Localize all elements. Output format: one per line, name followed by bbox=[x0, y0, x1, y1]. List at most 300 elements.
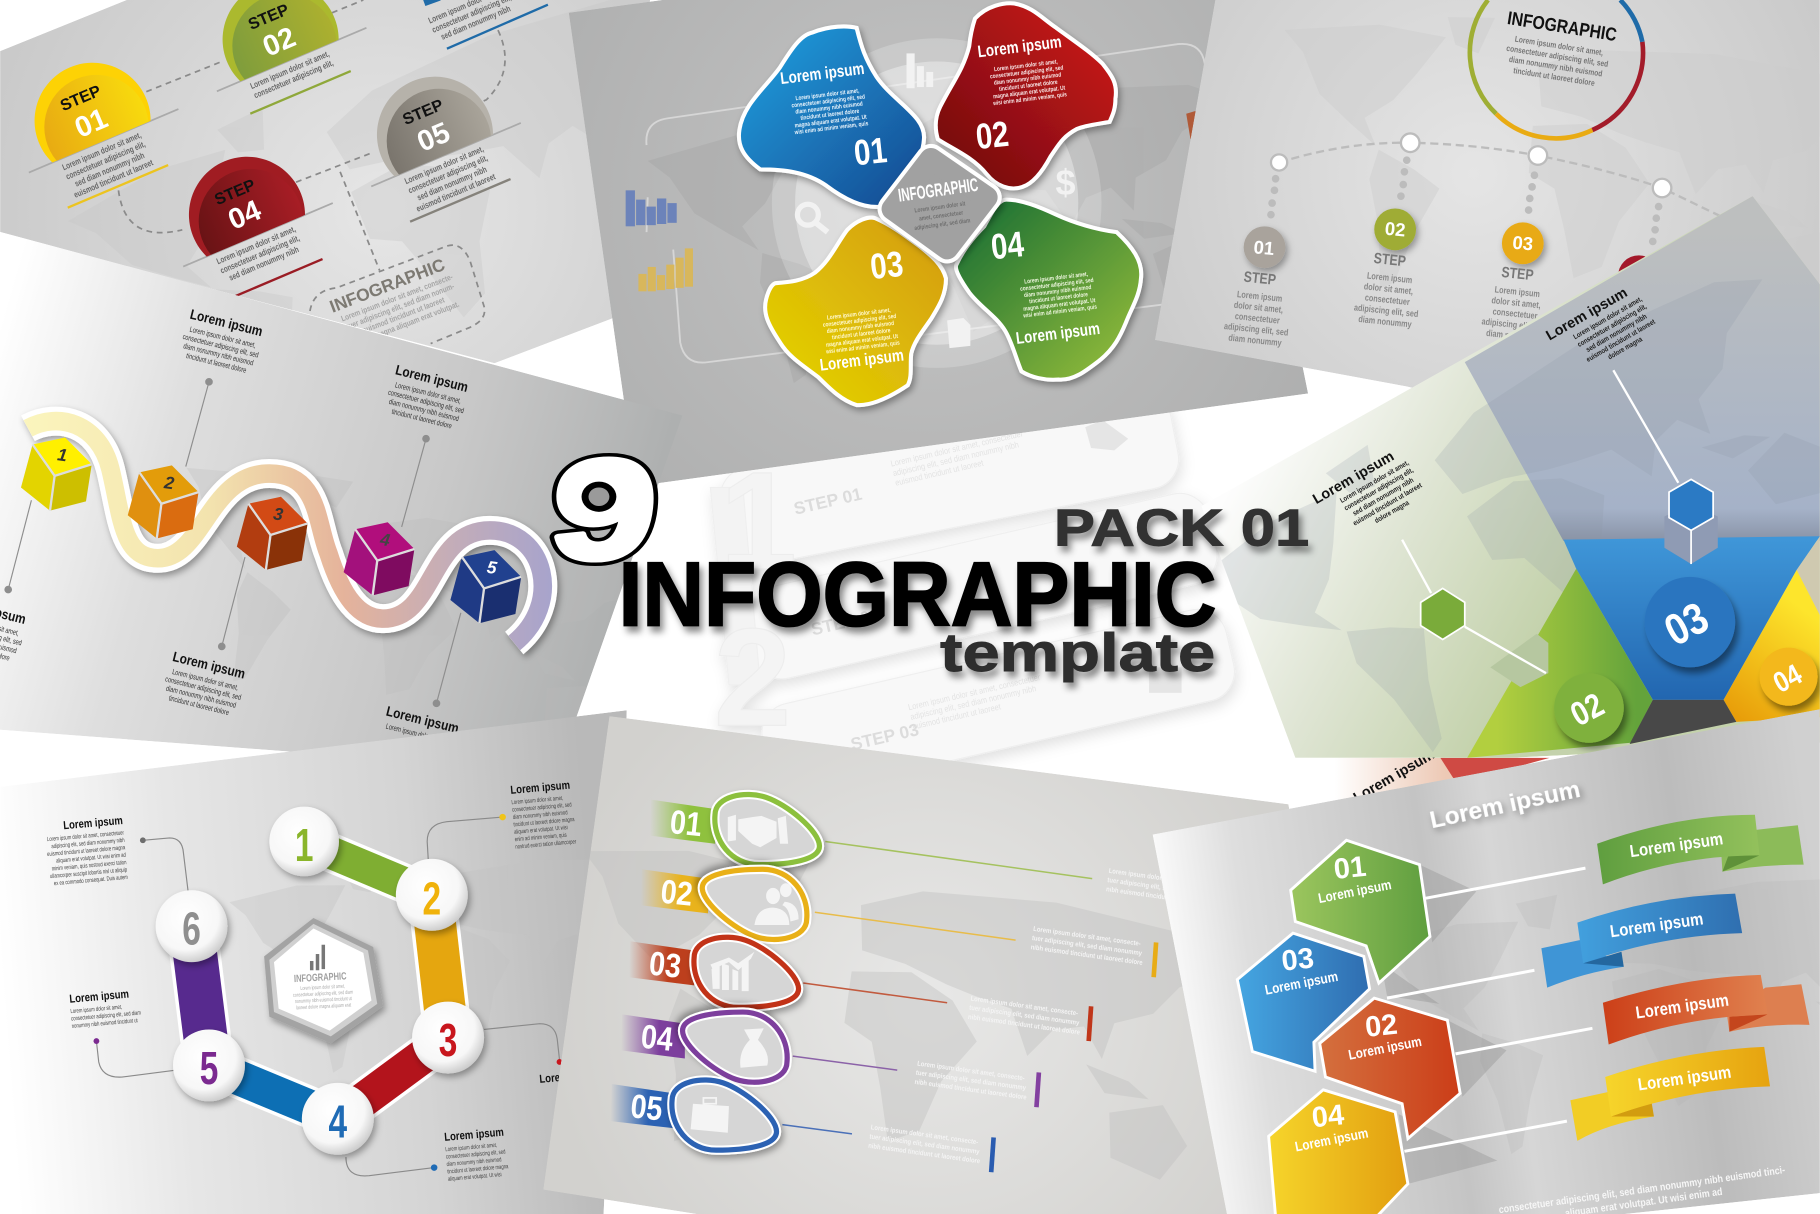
item 03: 03 bbox=[647, 944, 683, 985]
centre diamond: Lorem ipsum dolor sit bbox=[914, 201, 966, 215]
step 03 timeline bbox=[1480, 222, 1550, 344]
panel: embossed white steps template: STEP 01 bbox=[792, 484, 864, 519]
blob 02 red: magna aliquam erat volutpat. Ut bbox=[993, 85, 1066, 101]
title: template: template bbox=[940, 624, 1215, 683]
centre hexagon: laoreet dolore magna aliquam erat bbox=[296, 1002, 352, 1011]
blob 03 yellow bbox=[765, 218, 946, 405]
step 02 timeline: 02 bbox=[1384, 218, 1406, 240]
long shadows bbox=[1381, 865, 1507, 1184]
ball 5 bbox=[173, 1029, 245, 1101]
callout text 3: diam nonummy nibh euismod bbox=[165, 685, 237, 710]
text block top left: aliquam erat volutpat. Ut wisi enim ad bbox=[56, 852, 126, 865]
text block top left: minim veniam, quis nostrud exerci tation bbox=[51, 859, 127, 873]
infographic dashed box text: tuer adipiscing elit, sed diam nonum- bbox=[345, 281, 456, 331]
step 01 timeline bbox=[1222, 226, 1292, 349]
blob 04 green: diam nonummy nibh euismod bbox=[1024, 285, 1092, 299]
blue trapezoid bbox=[1563, 536, 1820, 700]
panel: embossed white steps template: 1 bbox=[720, 443, 797, 599]
left text block bbox=[1310, 443, 1429, 547]
panel: embossed white steps template bbox=[710, 386, 1240, 801]
step 02 timeline: diam nonummy bbox=[1358, 313, 1413, 330]
item 04: 04 bbox=[639, 1018, 675, 1058]
text block lower left bbox=[69, 987, 142, 1030]
ring text bbox=[1506, 11, 1616, 86]
step 02 timeline: STEP bbox=[1373, 250, 1407, 270]
step 03 fragment: sed diam nonummy nibh bbox=[439, 3, 512, 42]
text block clipped right: Lorem ipsum bbox=[539, 1068, 600, 1086]
step 03 timeline: adipiscing elit, sed bbox=[1481, 315, 1547, 333]
text block top right: consectetuer adipiscing elit, sed bbox=[512, 802, 572, 814]
panel: embossed white steps template: STEP 03 bbox=[849, 719, 921, 754]
white descriptions: tuer adipiscing elit, sed diam nonummy bbox=[915, 1069, 1027, 1092]
hex 03: 03 bbox=[1280, 943, 1316, 978]
callout text 4: tincidunt ut laoreet dolore bbox=[391, 408, 453, 431]
text block bottom: tincidunt ut laoreet dolore magna bbox=[447, 1164, 509, 1176]
text block top left: Lorem ipsum bbox=[63, 814, 123, 833]
text block top left: Lorem ipsum dolor sit amet, consectetuer bbox=[47, 830, 124, 843]
centre diamond: amet, consectetuer bbox=[919, 210, 964, 223]
blob 01 blue: wisi enim ad minim veniam, quis bbox=[793, 121, 869, 137]
red fragment panel under triangle slide bbox=[1286, 747, 1549, 812]
blob 01 blue: Lorem ipsum dolor sit amet, bbox=[795, 88, 860, 102]
text block top right: diam nonummy nibh euismod bbox=[513, 810, 568, 821]
hex 04: 04 bbox=[1310, 1099, 1346, 1134]
step 05: consectetuer adipiscing elit, bbox=[407, 153, 489, 196]
panel: embossed white steps template: adipiscing elit, sed diam nonummy nibh bbox=[909, 684, 1037, 722]
text block top right: tincidunt ut laoreet dolore magna bbox=[513, 816, 575, 829]
panel: embossed white steps template: Lorem ipsum dolor sit amet, consectetuer bbox=[907, 672, 1042, 712]
step 02 timeline bbox=[1352, 208, 1422, 330]
white descriptions: tuer adipiscing elit, sed diam nonummy bbox=[1031, 935, 1143, 958]
step 05 bbox=[371, 76, 521, 223]
callout text 5: Lorem ipsum bbox=[385, 703, 461, 736]
blob 02 red: Lorem ipsum dolor sit amet, bbox=[994, 59, 1059, 73]
blob 04 green: 04 bbox=[989, 223, 1026, 267]
white descriptions: nibh euismod tincidunt ut laoreet dolore bbox=[1106, 886, 1219, 909]
item 02 bbox=[641, 869, 807, 939]
white descriptions: Lorem ipsum dolor sit amet, consecte- bbox=[917, 1060, 1025, 1083]
text block top left: euismod tincidunt ut laoreet dolore magna bbox=[47, 845, 126, 858]
white descriptions: Lorem ipsum dolor sit amet, consecte- bbox=[1108, 867, 1217, 890]
step 03 timeline: consectetuer bbox=[1492, 306, 1539, 321]
ribbon blue: Lorem ipsum bbox=[1609, 909, 1705, 942]
ring text: diam nonummy nibh euismod bbox=[1508, 54, 1603, 79]
ball 3: 3 bbox=[439, 1014, 457, 1066]
cube 1: 1 bbox=[56, 444, 69, 465]
text block bottom bbox=[444, 1126, 509, 1183]
ball 2 bbox=[396, 859, 468, 931]
item 03 bbox=[629, 937, 799, 1007]
step 04: STEP bbox=[212, 176, 258, 209]
step 01 timeline: consectetuer bbox=[1234, 310, 1281, 326]
text block top right: nostrud exerci tation ullamcorper bbox=[515, 839, 577, 851]
text block top left bbox=[44, 814, 128, 888]
left text block: Lorem ipsum bbox=[1310, 448, 1397, 508]
callout text 3: Lorem ipsum dolor sit amet, bbox=[171, 668, 239, 693]
ring text: INFOGRAPHIC bbox=[1506, 7, 1618, 45]
panel: embossed white steps template: STEP 02 bbox=[809, 604, 881, 639]
right text block: sed diam nonummy nibh bbox=[1585, 313, 1648, 354]
background circle bbox=[772, 38, 1102, 368]
panel: embossed white steps template: adipiscing elit, sed diam nonummy nibh bbox=[892, 440, 1020, 478]
panel: embossed white steps template: Lorem ipsum dolor sit amet, consectetuer bbox=[890, 429, 1024, 469]
text block lower left: Lorem ipsum dolor sit amet, bbox=[70, 1004, 123, 1015]
centre hexagon bbox=[264, 918, 383, 1043]
title: PACK 01: PACK 01 bbox=[1054, 499, 1309, 557]
step 02: STEP bbox=[246, 1, 292, 34]
blob 02 red: wisi enim ad minim veniam, quis bbox=[992, 92, 1067, 108]
blob 01 blue: 01 bbox=[852, 129, 889, 173]
hex 04 bbox=[1269, 1090, 1408, 1214]
item 05 bbox=[611, 1080, 777, 1150]
infographic dashed box text: Lorem ipsum dolor sit amet, consecte- bbox=[340, 271, 455, 324]
step 03 timeline: diam nonummy bbox=[1486, 327, 1540, 344]
cube 3: 3 bbox=[272, 503, 285, 525]
text block bottom: consectetuer adipiscing elit, sed bbox=[446, 1149, 506, 1161]
blob 01 blue: diam nonummy nibh euismod bbox=[795, 101, 863, 116]
ribbon blue bbox=[1541, 894, 1742, 988]
text block top left: ex ea commodo consequat. Duis autem bbox=[54, 874, 128, 888]
white descriptions: Lorem ipsum dolor sit amet, consecte- bbox=[970, 995, 1078, 1018]
leader lines bbox=[782, 841, 1092, 1134]
yellow bar chart bbox=[638, 248, 693, 291]
cube 5 bbox=[450, 550, 521, 623]
blob 03 yellow: wisi enim ad minim veniam, quis bbox=[825, 340, 900, 356]
hex 02: Lorem ipsum bbox=[1347, 1033, 1423, 1063]
step 02: 02 bbox=[258, 21, 300, 63]
ribbon yellow: Lorem ipsum bbox=[1637, 1063, 1732, 1095]
step 05: Lorem ipsum dolor sit amet, bbox=[403, 144, 485, 186]
centre hexagon: nonummy nibh euismod tincidunt ut bbox=[295, 995, 352, 1004]
text block top left: ullamcorper suscipit lobortis nisl ut aliquip bbox=[50, 867, 128, 880]
callout text 2: Lorem ipsum dolor sit amet, bbox=[189, 326, 257, 350]
panel: egg icon list bbox=[543, 716, 1370, 1214]
white descriptions: nibh euismod tincidunt ut laoreet dolore bbox=[914, 1078, 1027, 1102]
step 02 bbox=[216, 0, 367, 115]
circle 04 bbox=[1760, 648, 1818, 706]
blob 02 red bbox=[936, 3, 1116, 188]
blob 02 red: diam nonummy nibh euismod bbox=[994, 72, 1062, 87]
blob 04 green: Lorem ipsum dolor sit amet, bbox=[1024, 271, 1089, 286]
hex 04: Lorem ipsum bbox=[1294, 1125, 1370, 1155]
text block top right bbox=[510, 779, 577, 851]
coloured side bars bbox=[989, 942, 1158, 1172]
text block lower left: nonummy nibh euismod tincidunt ut bbox=[72, 1018, 139, 1030]
icon: document bbox=[947, 318, 970, 348]
ribbon green: Lorem ipsum bbox=[1629, 829, 1724, 862]
hex 03: Lorem ipsum bbox=[1263, 968, 1339, 998]
step 01 timeline: diam nonummy bbox=[1228, 332, 1283, 348]
step 05: 05 bbox=[413, 117, 455, 159]
icon: bars white bbox=[907, 53, 933, 88]
hex 01 bbox=[1291, 840, 1430, 983]
green segment bbox=[1467, 569, 1653, 758]
node dots bbox=[1267, 156, 1662, 245]
infographic dashed box text: INFOGRAPHIC bbox=[327, 254, 448, 317]
icon: magnifier bbox=[797, 204, 828, 232]
dark segment bbox=[1630, 700, 1736, 744]
blue hex column bbox=[1613, 370, 1718, 564]
step 03 fragment bbox=[422, 0, 548, 49]
text block top right: aliquam erat volutpat. Ut wisi bbox=[514, 825, 568, 836]
step 01: euismod tincidunt ut laoreet bbox=[72, 157, 155, 200]
ribbon orange bbox=[1603, 975, 1809, 1045]
cube 1 bbox=[21, 438, 92, 511]
ribbon orange: Lorem ipsum bbox=[1634, 991, 1730, 1023]
ball 4: 4 bbox=[329, 1095, 348, 1148]
blob 01 blue: magna aliquam erat volutpat. Ut bbox=[794, 114, 867, 130]
icon: briefcase bbox=[691, 1098, 729, 1133]
blob 02 red: tincidunt ut laoreet dolore bbox=[999, 79, 1058, 93]
blob 04 green: consectetuer adipiscing elit, sed bbox=[1020, 277, 1094, 293]
panel: snake with cubes bbox=[0, 229, 683, 772]
callout text 2: diam nonummy nibh euismod bbox=[182, 343, 254, 368]
icon: handshake bbox=[728, 815, 788, 847]
panel: timeline with ring bbox=[1155, 0, 1820, 388]
step 03 timeline: STEP bbox=[1501, 264, 1534, 283]
callout text 4: Lorem ipsum dolor sit amet, bbox=[394, 382, 462, 406]
icon: money bag bbox=[740, 1028, 768, 1068]
callout text 2: Lorem ipsum bbox=[188, 306, 264, 339]
step 03 timeline: dolor sit amet, bbox=[1491, 294, 1541, 311]
item 01 bbox=[650, 794, 819, 865]
callout text 3: Lorem ipsum bbox=[171, 648, 247, 682]
right text block: dolore magna bbox=[1607, 336, 1644, 362]
white descriptions: Lorem ipsum dolor sit amet, consecte- bbox=[1033, 925, 1141, 948]
blue bar chart bbox=[626, 190, 677, 226]
step 05: euismod tincidunt ut laoreet bbox=[415, 171, 497, 214]
blob 01 blue: consectetuer adipiscing elit, sed bbox=[791, 94, 865, 110]
blob 03 yellow: Lorem ipsum bbox=[819, 346, 905, 375]
step 05: sed diam nonummy nibh bbox=[415, 164, 489, 203]
step 01: STEP bbox=[58, 82, 104, 115]
white descriptions bbox=[868, 867, 1221, 1166]
centre diamond bbox=[893, 159, 987, 248]
blob 02 red: consectetuer adipiscing elit, sed bbox=[990, 65, 1064, 81]
right text block: Lorem ipsum dolor sit amet, bbox=[1572, 296, 1644, 341]
callout text 5: Lorem ipsum dolor sit amet, bbox=[385, 723, 453, 747]
panel: hexagon ring bbox=[0, 710, 685, 1214]
text block bottom: Lorem ipsum bbox=[444, 1126, 504, 1144]
hex 02 bbox=[1320, 998, 1460, 1139]
white descriptions: nibh euismod tincidunt ut laoreet dolore bbox=[967, 1014, 1081, 1037]
rounded frame outline bbox=[646, 44, 1230, 363]
step 01 timeline: 01 bbox=[1253, 236, 1275, 259]
ribbon bbox=[28, 421, 543, 643]
panel: five steps semicircles bbox=[0, 0, 650, 363]
callout text 2: tincidunt ut laoreet dolore bbox=[185, 352, 247, 375]
green hex connector bbox=[1402, 540, 1548, 687]
ball 3 bbox=[412, 1002, 484, 1074]
ball 5: 5 bbox=[200, 1042, 218, 1094]
circle 03: 03 bbox=[1656, 592, 1716, 656]
ribbon yellow bbox=[1570, 1047, 1770, 1141]
hex 01: Lorem ipsum bbox=[1317, 876, 1393, 906]
right text block bbox=[1544, 280, 1662, 383]
step 04 bbox=[183, 156, 333, 296]
ring text: Lorem ipsum dolor sit amet, bbox=[1514, 34, 1604, 58]
cube 2: 2 bbox=[162, 472, 176, 493]
title: INFOGRAPHIC: INFOGRAPHIC bbox=[619, 545, 1216, 646]
callout text 4: Lorem ipsum bbox=[394, 361, 470, 395]
callout text 3: consectetuer adipiscing elit, sed bbox=[164, 676, 242, 702]
white descriptions: nibh euismod tincidunt ut laoreet dolore bbox=[868, 1142, 981, 1166]
item 02: 02 bbox=[659, 872, 695, 913]
icon: chart bbox=[710, 952, 754, 991]
panel: hexagons and ribbons bbox=[1153, 709, 1820, 1214]
right text block: euismod tincidunt ut laoreet bbox=[1585, 318, 1657, 364]
blob 04 green bbox=[956, 200, 1141, 380]
ball 4 bbox=[302, 1083, 374, 1155]
callout text 2: consectetuer adipiscing elit, sed bbox=[182, 333, 259, 360]
step 02 timeline: Lorem ipsum bbox=[1367, 270, 1413, 285]
callout text 4 bbox=[383, 361, 472, 433]
step 02: Lorem ipsum dolor sit amet, bbox=[249, 49, 331, 91]
blob 01 blue: tincidunt ut laoreet dolore bbox=[800, 108, 860, 122]
dashed arc bbox=[1279, 143, 1729, 221]
infographic dashed box text: dolore magna aliquam erat volutpat. bbox=[353, 299, 461, 348]
text block top left: adipiscing elit, sed diam nonummy nibh bbox=[51, 837, 125, 851]
circle 04: 04 bbox=[1768, 658, 1807, 699]
left text block: dolore magna bbox=[1374, 499, 1411, 525]
step 02: consectetuer adipiscing elit, bbox=[252, 58, 335, 100]
panel: flower infographic bbox=[569, 0, 1308, 486]
left text block: sed diam nonummy nibh bbox=[1352, 477, 1415, 518]
step 03 timeline: 03 bbox=[1512, 232, 1534, 254]
icon: dollar: $ bbox=[1056, 162, 1076, 203]
callout text 2 bbox=[177, 305, 266, 377]
panel: triangles slide bbox=[1203, 196, 1820, 758]
blob 03 yellow: magna aliquam erat volutpat. Ut bbox=[826, 334, 899, 349]
beige segment bbox=[1797, 536, 1820, 615]
callout text 4: diam nonummy nibh euismod bbox=[388, 398, 460, 423]
item 04 bbox=[621, 1012, 787, 1082]
blob 03 yellow: diam nonummy nibh euismod bbox=[826, 320, 894, 335]
step 04: sed diam nonummy nibh bbox=[227, 244, 301, 283]
orange fragment bbox=[1186, 110, 1196, 140]
circle 02 bbox=[1554, 673, 1624, 743]
step 03 timeline: Lorem ipsum bbox=[1494, 284, 1541, 299]
blob 01 blue bbox=[739, 26, 924, 207]
text block top right: enim ad minim veniam, quis bbox=[514, 832, 567, 844]
blob 01 blue: Lorem ipsum bbox=[779, 60, 865, 88]
callout text 3: tincidunt ut laoreet dolore bbox=[168, 695, 230, 717]
infographic dashed box text bbox=[329, 260, 460, 336]
ring text: consectetuer adipiscing elit, sed bbox=[1506, 43, 1609, 69]
connecting bars bbox=[192, 841, 448, 1119]
step 02 timeline: adipiscing elit, sed bbox=[1353, 302, 1419, 319]
circle 02: 02 bbox=[1564, 685, 1610, 734]
step 01: Lorem ipsum dolor sit amet, bbox=[61, 130, 143, 172]
centre diamond: INFOGRAPHIC bbox=[897, 175, 980, 207]
hex 03 bbox=[1237, 933, 1370, 1071]
left text block: consectetuer adipiscing elit, bbox=[1343, 467, 1415, 513]
centre hexagon: consectetuer adipiscing elit, sed diam bbox=[293, 989, 353, 998]
blob 04 green: Lorem ipsum bbox=[1015, 320, 1101, 348]
step 01 timeline: STEP bbox=[1243, 268, 1277, 288]
step 01 timeline: dolor sit amet, bbox=[1233, 299, 1284, 315]
left text block: euismod tincidunt ut laoreet bbox=[1352, 482, 1424, 528]
white descriptions: tuer adipiscing elit, sed diam nonummy bbox=[969, 1004, 1080, 1027]
blob 04 green: magna aliquam erat volutpat. Ut bbox=[1023, 298, 1096, 313]
step 01 timeline: Lorem ipsum bbox=[1237, 288, 1283, 304]
text block bottom: diam nonummy nibh euismod bbox=[446, 1157, 502, 1168]
yellow segment bbox=[1724, 570, 1820, 722]
white descriptions: nibh euismod tincidunt ut laoreet dolore bbox=[1030, 944, 1143, 967]
hex 02: 02 bbox=[1364, 1009, 1399, 1044]
text block lower left: Lorem ipsum bbox=[69, 988, 130, 1006]
blob 02 red: 02 bbox=[974, 113, 1011, 157]
cube 5: 5 bbox=[486, 557, 498, 578]
text block top right: Lorem ipsum dolor sit amet, bbox=[511, 795, 564, 807]
step 01 timeline: adipiscing elit, sed bbox=[1223, 320, 1289, 338]
cube 4 bbox=[344, 522, 414, 595]
left text block: Lorem ipsum dolor sit amet, bbox=[1339, 459, 1411, 505]
callout lines bbox=[5, 379, 461, 707]
heading: Lorem ipsum bbox=[1427, 776, 1583, 834]
right text block: Lorem ipsum bbox=[1544, 285, 1630, 344]
ring bbox=[1470, 0, 1643, 138]
step 01: consectetuer adipiscing elit, bbox=[64, 139, 147, 182]
panel: embossed white steps template: euismod tincidunt ut laoreet bbox=[912, 702, 1002, 732]
infographic dashed box text: euismod tincidunt ut laoreet bbox=[361, 295, 446, 335]
icon: people bbox=[754, 883, 799, 925]
hex 01: 01 bbox=[1332, 851, 1368, 886]
step 01: sed diam nonummy nibh bbox=[73, 150, 146, 189]
blob 04 green: wisi enim ad minim veniam, quis bbox=[1022, 304, 1097, 320]
ribbon green bbox=[1597, 815, 1804, 884]
panel: embossed white steps template: 2 bbox=[714, 599, 791, 755]
text block top right: Lorem ipsum bbox=[510, 779, 571, 797]
centre hexagon: Lorem ipsum dolor sit amet, bbox=[300, 983, 345, 991]
ball 6: 6 bbox=[182, 902, 201, 955]
white descriptions: tuer adipiscing elit, sed diam nonummy bbox=[869, 1133, 980, 1156]
callout connectors bbox=[96, 817, 559, 1176]
ring text: tincidunt ut laoreet dolore bbox=[1513, 65, 1595, 88]
right text block: consectetuer adipiscing elit, bbox=[1576, 303, 1648, 349]
step 02 timeline: consectetuer bbox=[1364, 292, 1411, 307]
panel: embossed white steps template: euismod tincidunt ut laoreet bbox=[894, 458, 985, 488]
red fragment panel under triangle slide: Lorem ipsum bbox=[1351, 747, 1438, 806]
dashed connectors bbox=[118, 0, 505, 344]
callout text 1 bbox=[0, 593, 30, 665]
white descriptions: tuer adipiscing elit, sed diam nonummy bbox=[1107, 877, 1218, 900]
centre diamond: adipiscing elit, sed diam bbox=[914, 218, 971, 232]
step 04 node bbox=[1618, 255, 1646, 272]
blob 03 yellow: tincidunt ut laoreet dolore bbox=[832, 328, 891, 342]
step 04: Lorem ipsum dolor sit amet, bbox=[215, 224, 297, 266]
blob 03 yellow: Lorem ipsum dolor sit amet, bbox=[827, 307, 891, 322]
step 02 timeline: dolor sit amet, bbox=[1363, 280, 1414, 297]
blob 02 red: Lorem ipsum bbox=[977, 33, 1063, 62]
ball 1: 1 bbox=[295, 819, 313, 872]
cube 4: 4 bbox=[378, 529, 392, 550]
blob 03 yellow: 03 bbox=[868, 243, 905, 287]
cube 3 bbox=[237, 497, 308, 570]
ball 6 bbox=[156, 890, 228, 962]
callout text 3 bbox=[160, 648, 249, 719]
ball 1 bbox=[269, 807, 339, 876]
white descriptions: Lorem ipsum dolor sit amet, consecte- bbox=[870, 1124, 979, 1146]
text block bottom: aliquam erat volutpat. Ut wisi bbox=[448, 1172, 502, 1183]
callout text 4: consectetuer adipiscing elit, sed bbox=[387, 389, 465, 416]
text block lower left: consectetuer adipiscing elit, sed diam bbox=[71, 1010, 141, 1023]
connector lines bbox=[1387, 868, 1592, 1151]
blob 03 yellow: consectetuer adipiscing elit, sed bbox=[823, 313, 897, 329]
cube 2 bbox=[128, 465, 199, 539]
title numeral 9: 9 bbox=[544, 431, 664, 589]
step 05: STEP bbox=[400, 96, 446, 129]
